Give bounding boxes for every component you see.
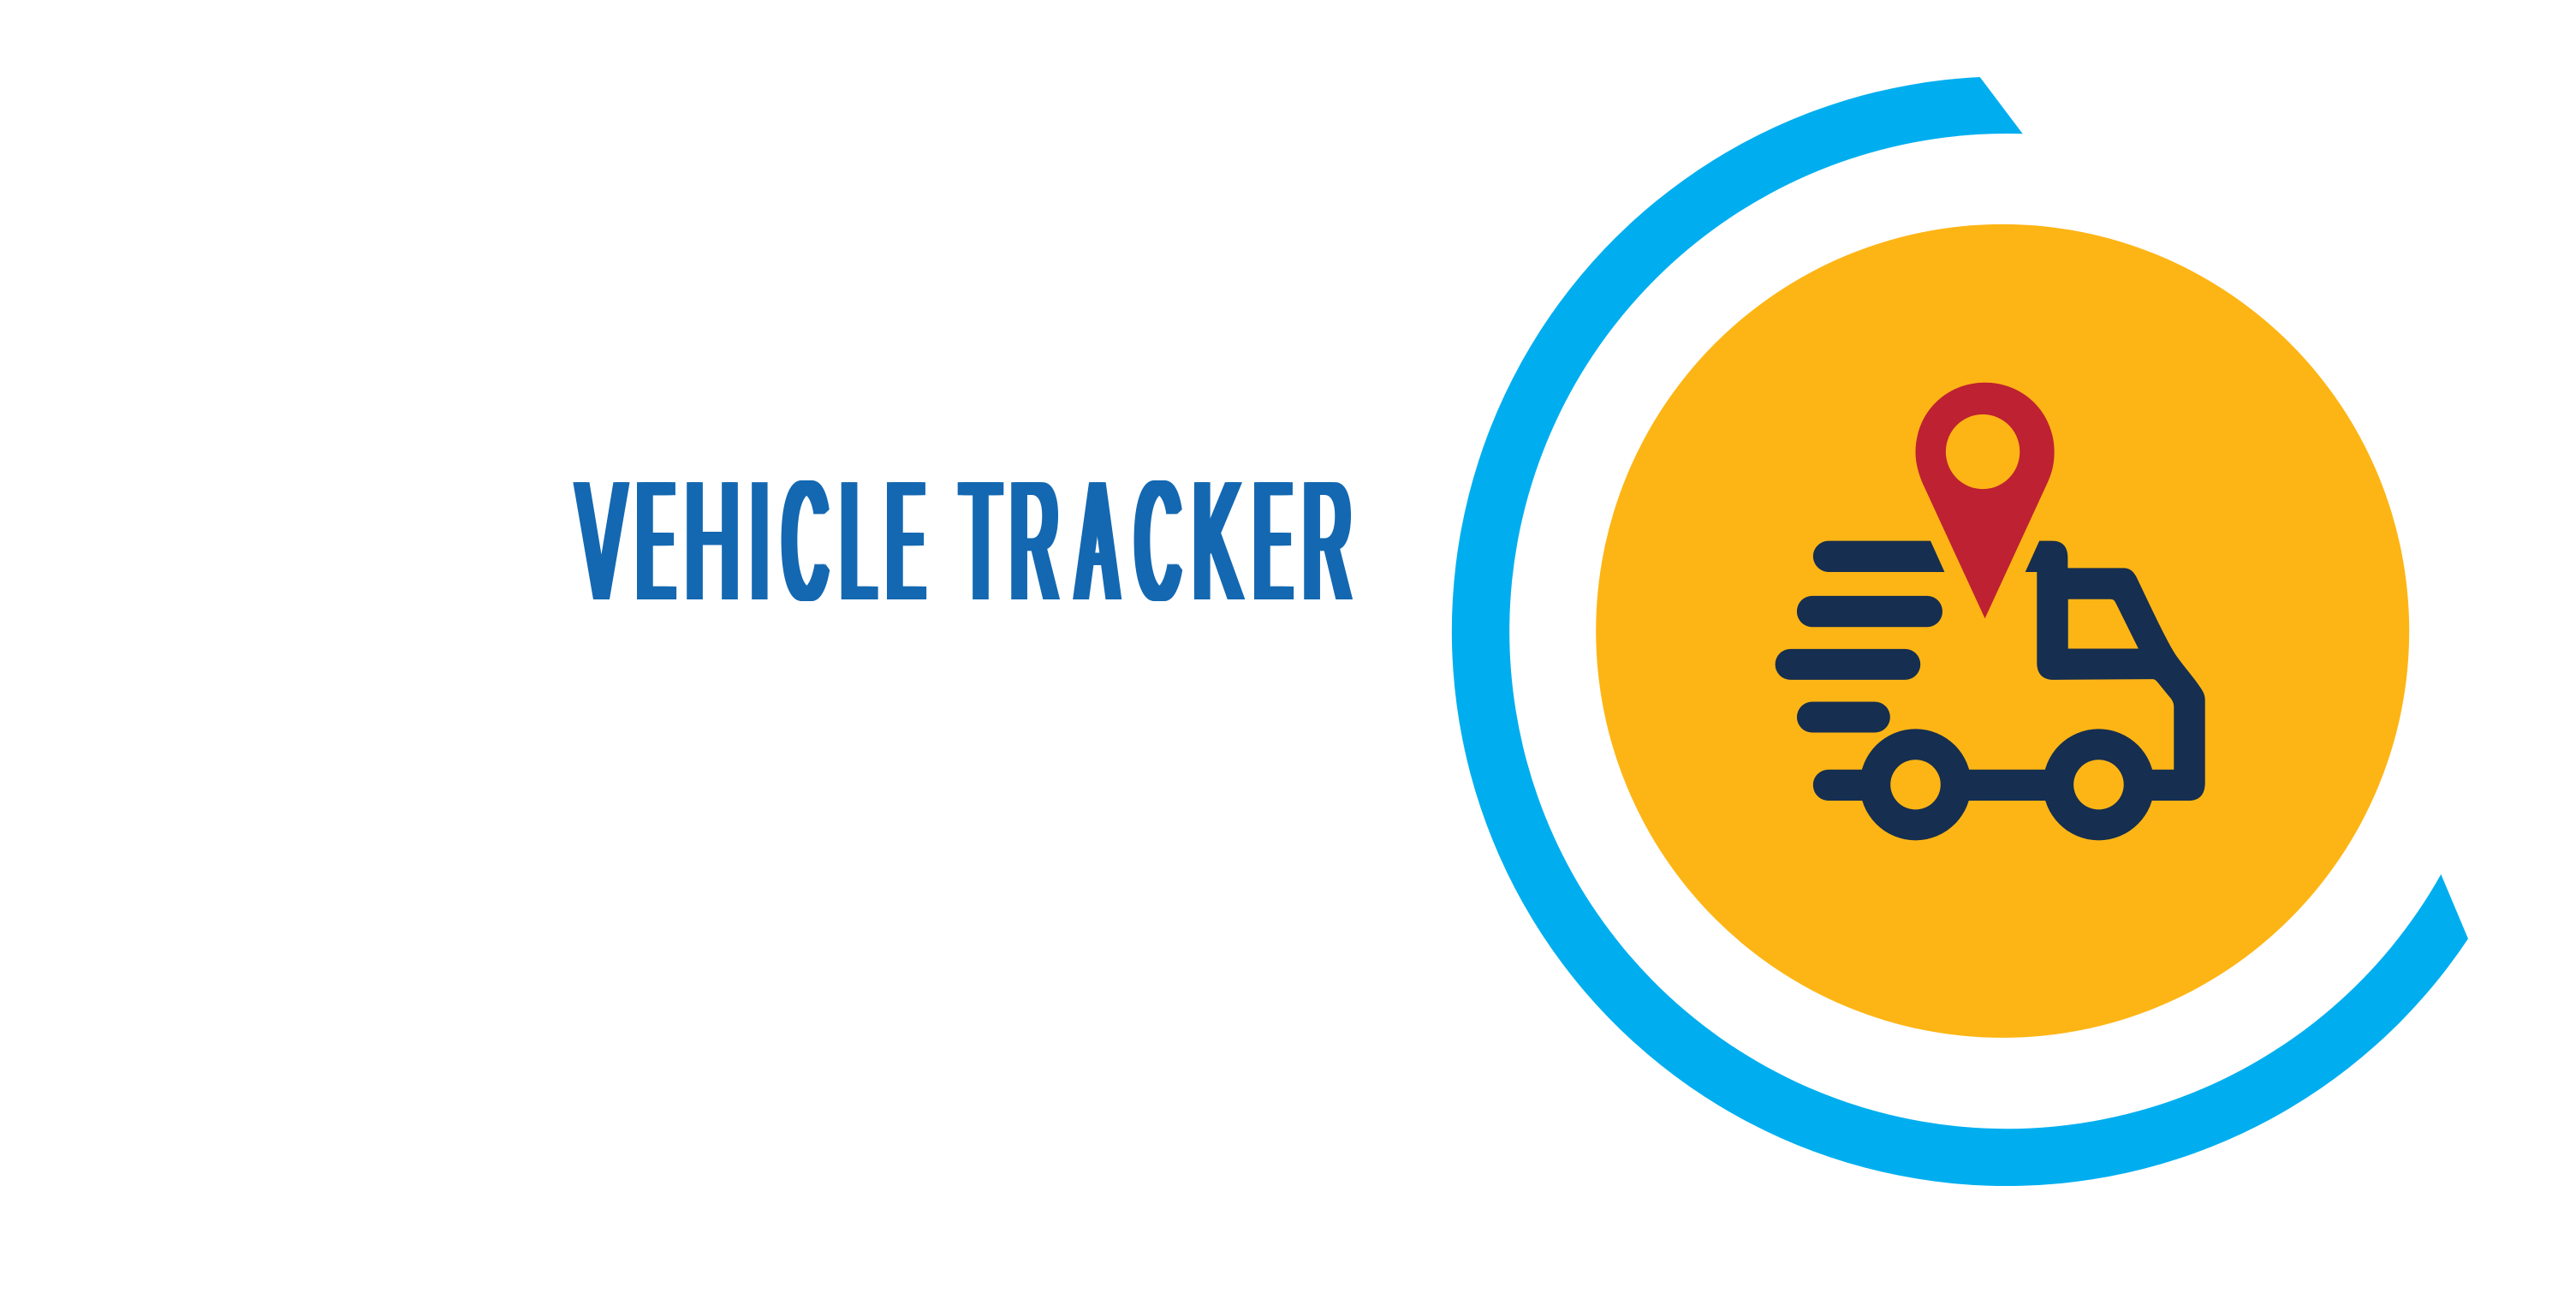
title: VEHICLE TRACKER: C: [1131, 446, 1175, 636]
icon: truck with location pin: [1776, 383, 2205, 840]
title: VEHICLE TRACKER: A: [1072, 446, 1110, 636]
title: VEHICLE TRACKER: C: [778, 446, 822, 636]
title: VEHICLE TRACKER: E: [1250, 446, 1285, 636]
icon: rear wheel: [1859, 729, 1971, 840]
title: VEHICLE TRACKER: R: [1299, 446, 1346, 636]
title: VEHICLE TRACKER: V: [573, 446, 621, 636]
title: VEHICLE TRACKER: L: [836, 446, 869, 636]
title: VEHICLE TRACKER: [573, 446, 1353, 636]
title: VEHICLE TRACKER: T: [956, 446, 995, 636]
title: VEHICLE TRACKER: R: [1006, 446, 1053, 636]
blue open ring: [1452, 77, 2468, 1186]
yellow disc: [1596, 224, 2409, 1038]
title: VEHICLE TRACKER: I: [736, 446, 783, 636]
icon: location pin: [1915, 383, 2055, 618]
title: VEHICLE TRACKER: E: [633, 446, 668, 636]
title: VEHICLE TRACKER: H: [681, 446, 735, 636]
title: VEHICLE TRACKER: E: [883, 446, 918, 636]
icon: truck body: [1813, 541, 2205, 801]
title: VEHICLE TRACKER: K: [1188, 446, 1237, 636]
icon: speed lines: [1776, 541, 1944, 732]
icon: front wheel: [2043, 729, 2154, 840]
